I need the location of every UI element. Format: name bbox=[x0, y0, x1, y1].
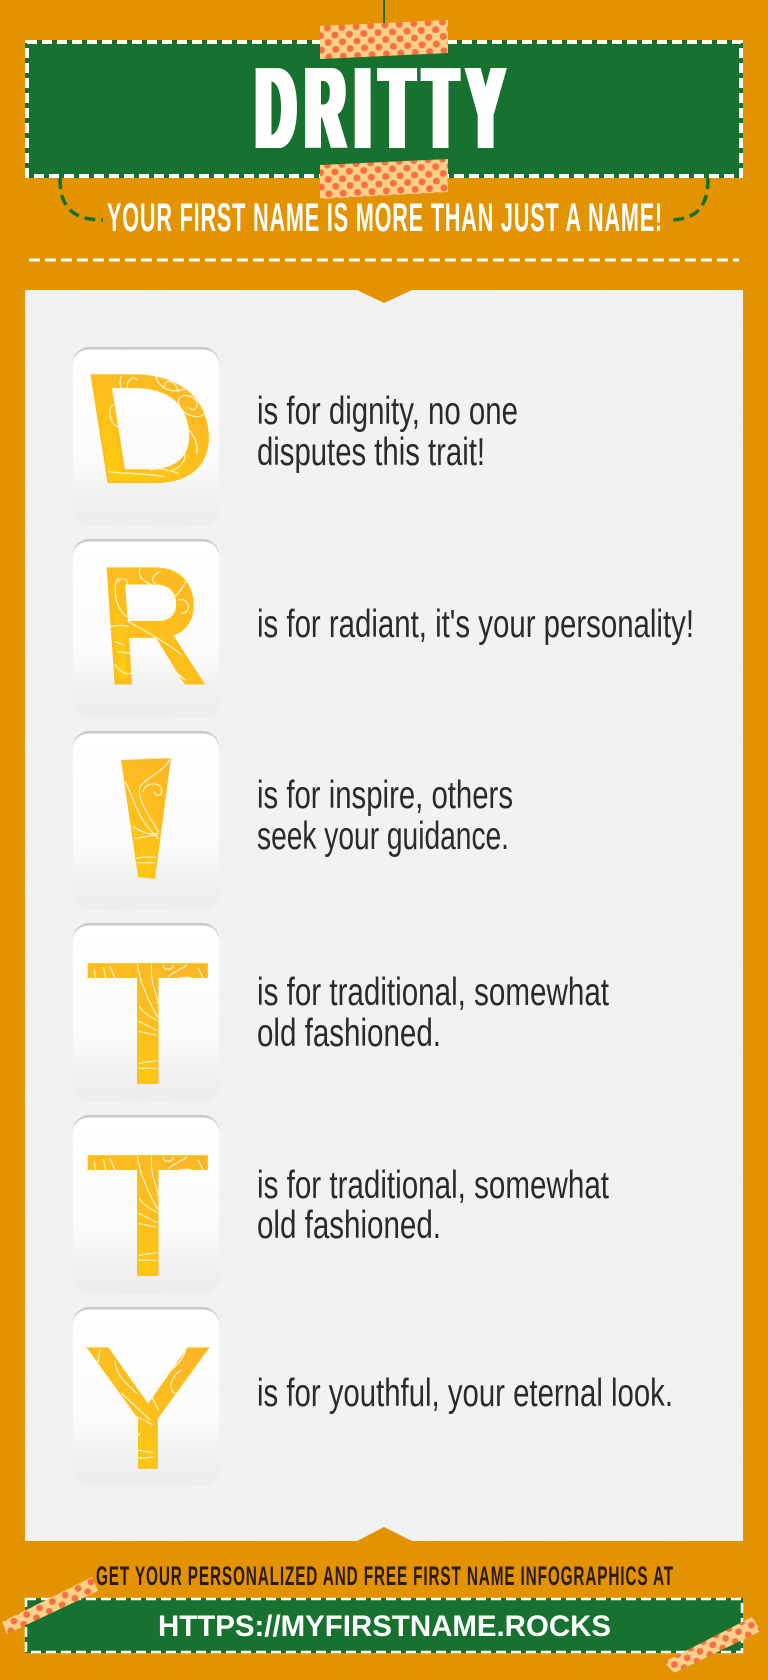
letter D: D bbox=[72, 342, 229, 515]
right dashed bracket bbox=[669, 178, 708, 220]
tile: Y bbox=[73, 1307, 219, 1505]
text: D bbox=[257, 390, 518, 474]
tile: T bbox=[73, 923, 219, 1120]
dashed divider bbox=[29, 258, 739, 262]
footer right tape bbox=[664, 1617, 761, 1673]
text: I: is for inspire, others bbox=[257, 774, 513, 817]
hanging string bbox=[383, 0, 385, 24]
tile: R bbox=[73, 535, 219, 717]
text: D: is for dignity, no one bbox=[257, 390, 518, 433]
tile: I bbox=[73, 731, 219, 909]
text: T: old fashioned. bbox=[257, 1012, 441, 1055]
text: I: seek your guidance. bbox=[257, 815, 509, 858]
panel: letters bbox=[25, 290, 743, 1541]
letter T second: T bbox=[84, 1118, 212, 1312]
title banner bbox=[25, 40, 743, 178]
top tape bbox=[320, 20, 448, 59]
tile: D bbox=[72, 342, 229, 525]
letter I bbox=[121, 758, 171, 879]
text: T second: is for traditional, somewhat bbox=[257, 1164, 609, 1207]
text: I bbox=[257, 774, 513, 858]
letter R: R bbox=[95, 535, 210, 717]
letter Y: Y bbox=[84, 1310, 212, 1505]
text: T: is for traditional, somewhat bbox=[257, 971, 609, 1014]
tile: T second bbox=[73, 1115, 219, 1312]
text: T second bbox=[257, 1164, 609, 1247]
footer left tape bbox=[2, 1577, 98, 1634]
letter T: T bbox=[84, 926, 212, 1120]
text: D: disputes this trait! bbox=[257, 431, 485, 474]
letter I: I bbox=[90, 720, 201, 918]
footer url: HTTPS://MYFIRSTNAME.ROCKS bbox=[158, 1610, 611, 1643]
left dashed bracket bbox=[60, 178, 103, 220]
bottom tape bbox=[320, 159, 448, 199]
text: T second: old fashioned. bbox=[257, 1204, 441, 1247]
footer banner bbox=[25, 1598, 743, 1653]
text: T bbox=[257, 971, 609, 1055]
